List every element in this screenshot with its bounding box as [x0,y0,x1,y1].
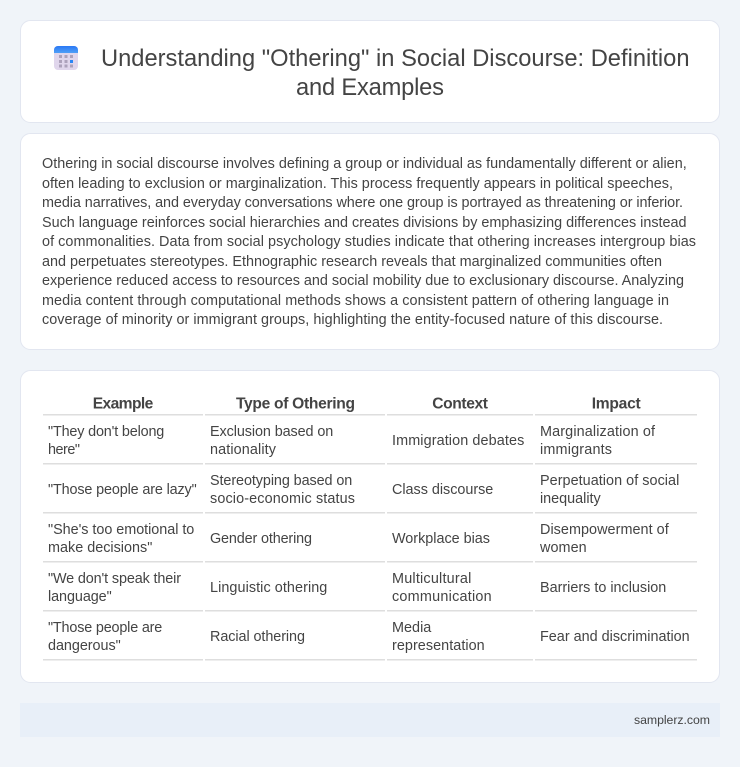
text block: description: media narratives, and everyday conversations where one group is portrayed as threatening or inferior. [42,195,683,211]
table row 4: communication [392,589,492,605]
table row 5: dangerous" [48,638,121,654]
table: othering examples [43,396,697,660]
table row 1: here" [48,442,80,458]
footer source text: samplerz.com [634,713,710,727]
table row 1: immigrants [540,442,612,458]
table header row: Example [93,396,154,412]
table row 1: "They don't belong [48,424,164,440]
text block: description: experience reduced access to resources and social mobility due to exclusionary discourse. Analyzing [42,273,684,289]
table row 3: make decisions" [48,540,152,556]
table row 2: "Those people are lazy" [48,482,197,498]
title: and Examples [296,75,444,101]
footer bar [20,703,720,737]
table row 5 [48,620,690,654]
table row 3: women [539,540,587,556]
table row 4: Multicultural [392,571,471,587]
table row 2 [48,473,679,507]
table row 1: Exclusion based on [210,424,333,440]
text block: description [42,156,696,328]
text block: description: media content through computational methods shows a consistent pattern of othering language in [42,293,669,309]
text block: description: coverage of minority or immigrant groups, highlighting the entity-focused nature of this discourse. [42,312,663,328]
table row 3: Disempowerment of [540,522,670,538]
table row 5: representation [392,638,485,654]
table row 5: Fear and discrimination [540,629,690,645]
table row 2: Class discourse [392,482,493,498]
text block: description: Othering in social discourse involves defining a group or individual as fundamentally different or alien, [42,156,687,172]
table header row: Context [432,396,488,412]
icon: calendar [54,46,78,70]
table row 5: Racial othering [210,629,305,645]
table row 3: "She's too emotional to [48,522,194,538]
table row 4 [48,571,666,605]
table header row [93,396,641,412]
table row 4: language" [48,589,112,605]
table row 3 [48,522,670,556]
table row 1: nationality [210,442,277,458]
table row 5: "Those people are [48,620,162,636]
table row 4: Linguistic othering [210,580,327,596]
title [101,46,690,101]
text block: description: of commonalities. Data from social psychology studies indicate that othering increases intergroup bias [42,234,696,250]
table row 1: Marginalization of [540,424,656,440]
table row 4: Barriers to inclusion [540,580,666,596]
table row 1 [48,424,656,458]
text block: description: and perpetuates stereotypes. Ethnographic research reveals that marginalized communities often [42,254,662,270]
panel: description card [20,134,720,350]
panel: table card [20,370,720,682]
table row 5: Media [392,620,431,636]
table header row: Impact [592,396,641,412]
table row 2: inequality [540,491,601,507]
panel: title card [20,20,720,122]
text block: description: often leading to exclusion or marginalization. This process frequently appears in political speeches, [42,176,673,192]
table row 4: "We don't speak their [48,571,181,587]
table row 3: Gender othering [210,531,312,547]
text block: description: Such language reinforces social hierarchies and creates divisions by emphasizing differences instead [42,215,686,231]
table row 3: Workplace bias [392,531,490,547]
title: Understanding "Othering" in Social Discourse: Definition [101,46,690,72]
table header row: Type of Othering [236,396,355,412]
table row 1: Immigration debates [392,433,524,449]
table row 2: socio-economic status [210,491,355,507]
table row 2: Stereotyping based on [210,473,352,489]
table row 2: Perpetuation of social [540,473,679,489]
